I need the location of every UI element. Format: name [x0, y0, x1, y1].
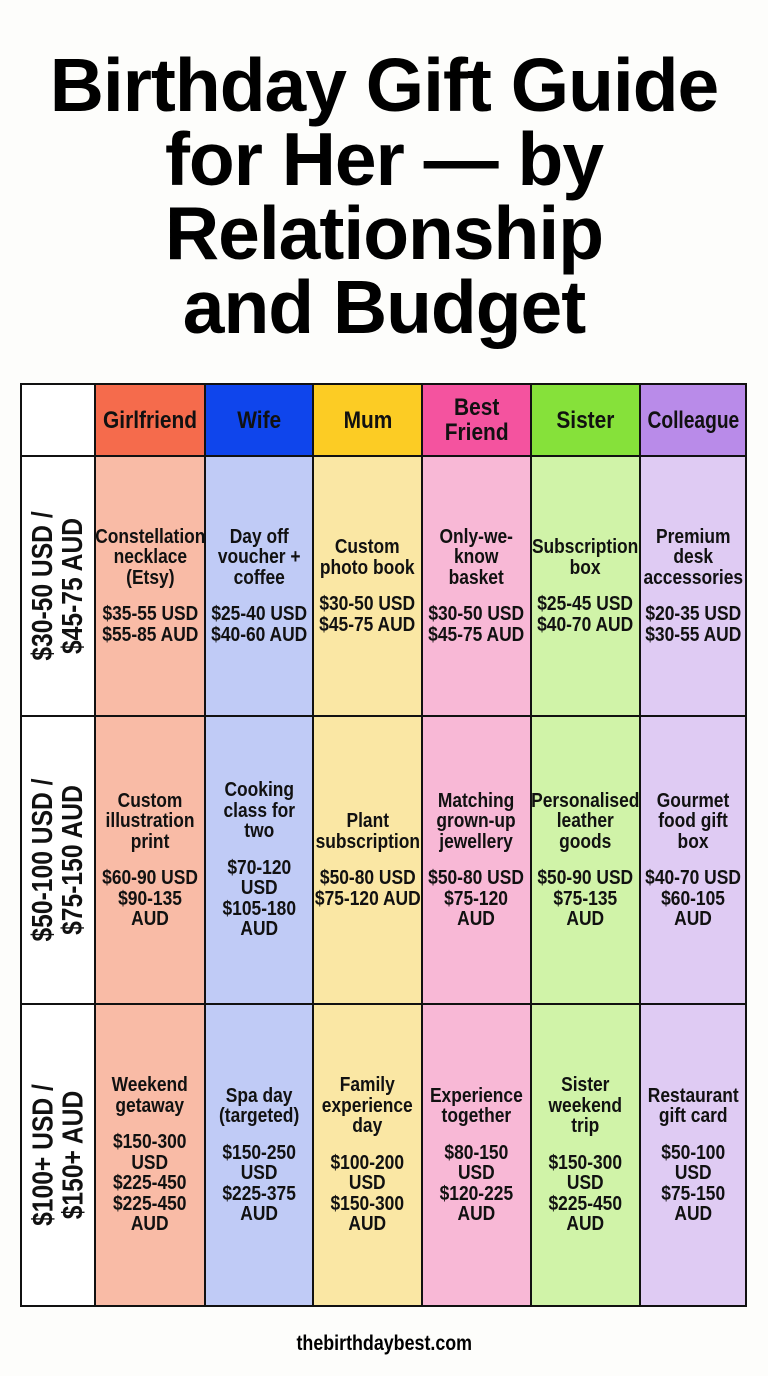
cell: Subscription: [532, 536, 639, 558]
cell: Cooking: [224, 779, 294, 801]
cell: voucher +: [218, 546, 300, 568]
cell: [641, 457, 745, 717]
cell: box: [678, 830, 708, 852]
cell: AUD: [349, 1213, 386, 1235]
header: Colleague: [641, 385, 745, 457]
cell: USD: [241, 1162, 277, 1184]
cell: [314, 717, 423, 1005]
cell: [423, 457, 532, 717]
cell: illustration: [106, 810, 194, 832]
cell: Only-we-: [440, 526, 513, 548]
row label: $100+: [22, 1005, 96, 1305]
cell: [96, 1005, 206, 1305]
cell: trip: [571, 1115, 600, 1137]
cell: desk: [673, 546, 713, 568]
cell: [206, 1005, 314, 1305]
header: Wife: Wife: [237, 406, 281, 434]
cell: box: [570, 556, 601, 578]
cell: $45-75 AUD: [428, 624, 525, 646]
cell: getaway: [116, 1095, 184, 1117]
cell: leather: [557, 810, 614, 832]
cell: [641, 1005, 745, 1305]
cell: $75-150: [661, 1182, 725, 1204]
cell: coffee: [233, 567, 285, 589]
cell: basket: [449, 567, 504, 589]
title: Birthday Gift Guide: [50, 43, 718, 127]
cell: [532, 1005, 641, 1305]
cell: [532, 457, 641, 717]
header: Best Friend: Friend: [445, 419, 508, 446]
cell: Family: [340, 1074, 395, 1096]
cell: Personalised: [531, 790, 640, 812]
row label: $100+: $100+ USD /: [27, 1084, 59, 1226]
cell: (Etsy): [126, 567, 174, 589]
cell: Weekend: [112, 1074, 188, 1096]
table: [20, 383, 747, 1307]
cell: USD: [241, 877, 277, 899]
cell: weekend: [549, 1095, 622, 1117]
cell: $75-135: [554, 888, 617, 910]
cell: class for: [223, 800, 295, 822]
cell: Experience: [430, 1084, 523, 1106]
corner cell: [22, 385, 96, 457]
cell: $225-450: [113, 1172, 187, 1194]
header: Girlfriend: Girlfriend: [103, 406, 197, 434]
header: Mum: [314, 385, 423, 457]
cell: Custom: [118, 790, 182, 812]
cell: AUD: [240, 1203, 278, 1225]
cell: Plant: [346, 810, 389, 832]
cell: [423, 717, 532, 1005]
title: Relationship: [165, 191, 603, 275]
cell: [641, 717, 745, 1005]
cell: Day off: [230, 526, 288, 548]
cell: Sister: [561, 1074, 610, 1096]
cell: day: [352, 1115, 382, 1137]
cell: AUD: [674, 1203, 712, 1225]
cell: Gourmet: [657, 790, 729, 812]
cell: Matching: [438, 790, 515, 812]
cell: [423, 1005, 532, 1305]
cell: AUD: [567, 908, 604, 930]
cell: $90-135: [118, 888, 182, 910]
cell: AUD: [131, 908, 169, 930]
cell: [96, 717, 206, 1005]
title: for Her — by: [165, 117, 603, 201]
cell: accessories: [643, 567, 743, 589]
cell: $225-450: [549, 1193, 622, 1215]
row label: $30-50: [22, 457, 96, 717]
cell: USD: [132, 1152, 168, 1174]
header: Girlfriend: [96, 385, 206, 457]
cell: $40-70 USD: [645, 867, 741, 889]
cell: $50-80 USD: [429, 867, 524, 889]
title: [50, 43, 718, 349]
cell: necklace: [113, 546, 187, 568]
row label: $50-100: $50-100 USD /: [27, 778, 59, 942]
header: Sister: [532, 385, 641, 457]
cell: $40-70 AUD: [537, 614, 634, 636]
cell: AUD: [131, 1213, 169, 1235]
cell: [314, 457, 423, 717]
header: Best Friend: [423, 385, 532, 457]
title: and Budget: [183, 265, 585, 349]
cell: print: [131, 830, 169, 852]
cell: USD: [349, 1172, 386, 1194]
cell: experience: [322, 1095, 413, 1117]
cell: goods: [559, 830, 612, 852]
cell: $30-50 USD: [429, 603, 524, 625]
cell: gift card: [659, 1105, 727, 1127]
row label: $30-50: $30-50 USD /: [27, 511, 59, 661]
cell: food gift: [658, 810, 728, 832]
cell: photo book: [320, 556, 415, 578]
cell: know: [454, 546, 499, 568]
header: Colleague: Colleague: [647, 406, 739, 434]
cell: $225-375: [222, 1182, 296, 1204]
header: Best Friend: Best: [454, 394, 499, 421]
header: Mum: Mum: [343, 406, 392, 434]
cell: [206, 457, 314, 717]
cell: USD: [458, 1162, 495, 1184]
cell: grown-up: [437, 810, 516, 832]
cell: Constellation: [95, 526, 205, 548]
cell: AUD: [674, 908, 712, 930]
header: Sister: Sister: [556, 406, 615, 434]
cell: $60-105: [661, 888, 725, 910]
cell: USD: [675, 1162, 711, 1184]
cell: Premium: [656, 526, 730, 548]
header: Wife: [206, 385, 314, 457]
row label: $100+: $150+ AUD: [57, 1091, 89, 1219]
cell: $80-150: [445, 1142, 508, 1164]
cell: $50-80 USD: [320, 867, 415, 889]
cell: [314, 1005, 423, 1305]
cell: USD: [567, 1172, 604, 1194]
cell: $70-120: [227, 857, 291, 879]
cell: Custom: [335, 536, 400, 558]
cell: $50-90 USD: [538, 867, 633, 889]
cell: $50-100: [661, 1142, 725, 1164]
row label: $30-50: $45-75 AUD: [57, 518, 89, 654]
footer: thebirthdaybest.com: [296, 1332, 472, 1355]
cell: Spa day: [226, 1084, 292, 1106]
cell: $25-45 USD: [538, 593, 633, 615]
cell: $150-300: [549, 1152, 622, 1174]
cell: [532, 717, 641, 1005]
cell: (targeted): [219, 1105, 299, 1127]
cell: $75-120 AUD: [315, 888, 420, 910]
cell: two: [244, 820, 274, 842]
row label: $50-100: $75-150 AUD: [57, 785, 89, 935]
cell: together: [442, 1105, 511, 1127]
cell: $150-250: [222, 1142, 296, 1164]
cell: $75-120: [445, 888, 508, 910]
cell: $150-300: [331, 1193, 404, 1215]
cell: Restaurant: [648, 1084, 738, 1106]
cell: AUD: [458, 1203, 495, 1225]
cell: jewellery: [440, 830, 513, 852]
cell: $100-200: [331, 1152, 404, 1174]
cell: $20-35 USD: [645, 603, 741, 625]
cell: $45-75 AUD: [319, 614, 416, 636]
cell: $225-450: [113, 1193, 187, 1215]
cell: $120-225: [440, 1182, 513, 1204]
cell: $150-300: [113, 1131, 187, 1153]
cell: $40-60 AUD: [211, 624, 307, 646]
cell: $30-55 AUD: [645, 624, 741, 646]
cell: AUD: [240, 918, 278, 940]
cell: subscription: [315, 830, 420, 852]
row label: $50-100: [22, 717, 96, 1005]
cell: $105-180: [222, 898, 296, 920]
cell: AUD: [567, 1213, 604, 1235]
cell: [96, 457, 206, 717]
cell: $25-40 USD: [211, 603, 307, 625]
cell: AUD: [458, 908, 495, 930]
cell: $35-55 USD: [102, 603, 198, 625]
cell: [206, 717, 314, 1005]
cell: $60-90 USD: [102, 867, 198, 889]
cell: $55-85 AUD: [102, 624, 198, 646]
cell: $30-50 USD: [320, 593, 415, 615]
